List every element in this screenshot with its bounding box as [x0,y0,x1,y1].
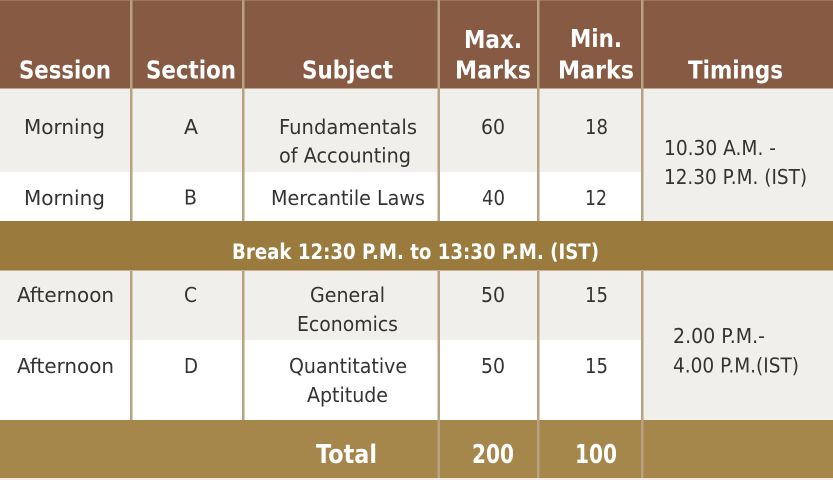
row: Afternoon section D [17,354,608,407]
morning timings: 10.30 A.M. - [664,136,776,160]
total row [0,420,833,478]
header: Max. Marks [455,25,531,84]
row: Morning section A: of Accounting [279,144,411,168]
row: Morning section B: Mercantile Laws [271,186,425,210]
afternoon timings: 4.00 P.M.(IST) [673,354,799,378]
row: Afternoon section D: Quantitative [289,354,407,378]
break banner: Break 12:30 P.M. to 13:30 P.M. (IST) [232,240,599,264]
row: Afternoon section C: C [184,283,197,307]
header: Max. Marks: Max. [464,25,522,54]
row: Morning section A: Morning [24,115,105,139]
total min marks: 100 [575,440,617,470]
total max marks: 200 [472,440,514,470]
afternoon timings: 2.00 P.M.- [673,324,765,348]
header row [0,0,833,88]
header: Min. Marks: Marks [558,56,634,84]
header: Min. Marks [558,24,634,84]
row: Afternoon section D: Aptitude [307,383,388,407]
header: Session: Session [19,56,111,84]
row: Morning section A: 60 [481,115,505,139]
row: Afternoon section D: 50 [481,354,505,378]
row: Afternoon section D: 15 [585,354,608,378]
header: Min. Marks: Min. [570,24,622,53]
row: Afternoon section D: Afternoon [17,354,114,378]
row: Morning section A: 18 [585,115,608,139]
break banner [0,221,833,270]
total label: Total [316,440,377,470]
row: Afternoon section C: 15 [585,283,608,307]
header: Max. Marks: Marks [455,56,531,84]
row backgrounds [0,89,833,420]
row: Morning section B [24,186,607,210]
row: Afternoon section C: General [310,283,385,307]
afternoon timings [673,324,799,378]
row: Morning section B: B [184,186,197,210]
header: Section: Section [146,56,236,84]
row: Morning section B: 12 [585,186,607,210]
row: Morning section A: A [184,115,198,139]
row: Morning section B: Morning [24,186,105,210]
row: Morning section A [24,115,608,168]
row: Morning section B: 40 [482,186,505,210]
row: Afternoon section C: 50 [481,283,505,307]
morning timings: 12.30 P.M. (IST) [664,165,807,189]
row: Afternoon section C [17,283,608,336]
row: Morning section A: Fundamentals [279,115,417,139]
row: Afternoon section C: Economics [297,312,398,336]
row: Afternoon section C: Afternoon [17,283,114,307]
header: Timings: Timings [688,56,783,84]
header: Subject: Subject [302,56,393,84]
row: Afternoon section D: D [184,354,198,378]
morning timings [664,136,807,189]
